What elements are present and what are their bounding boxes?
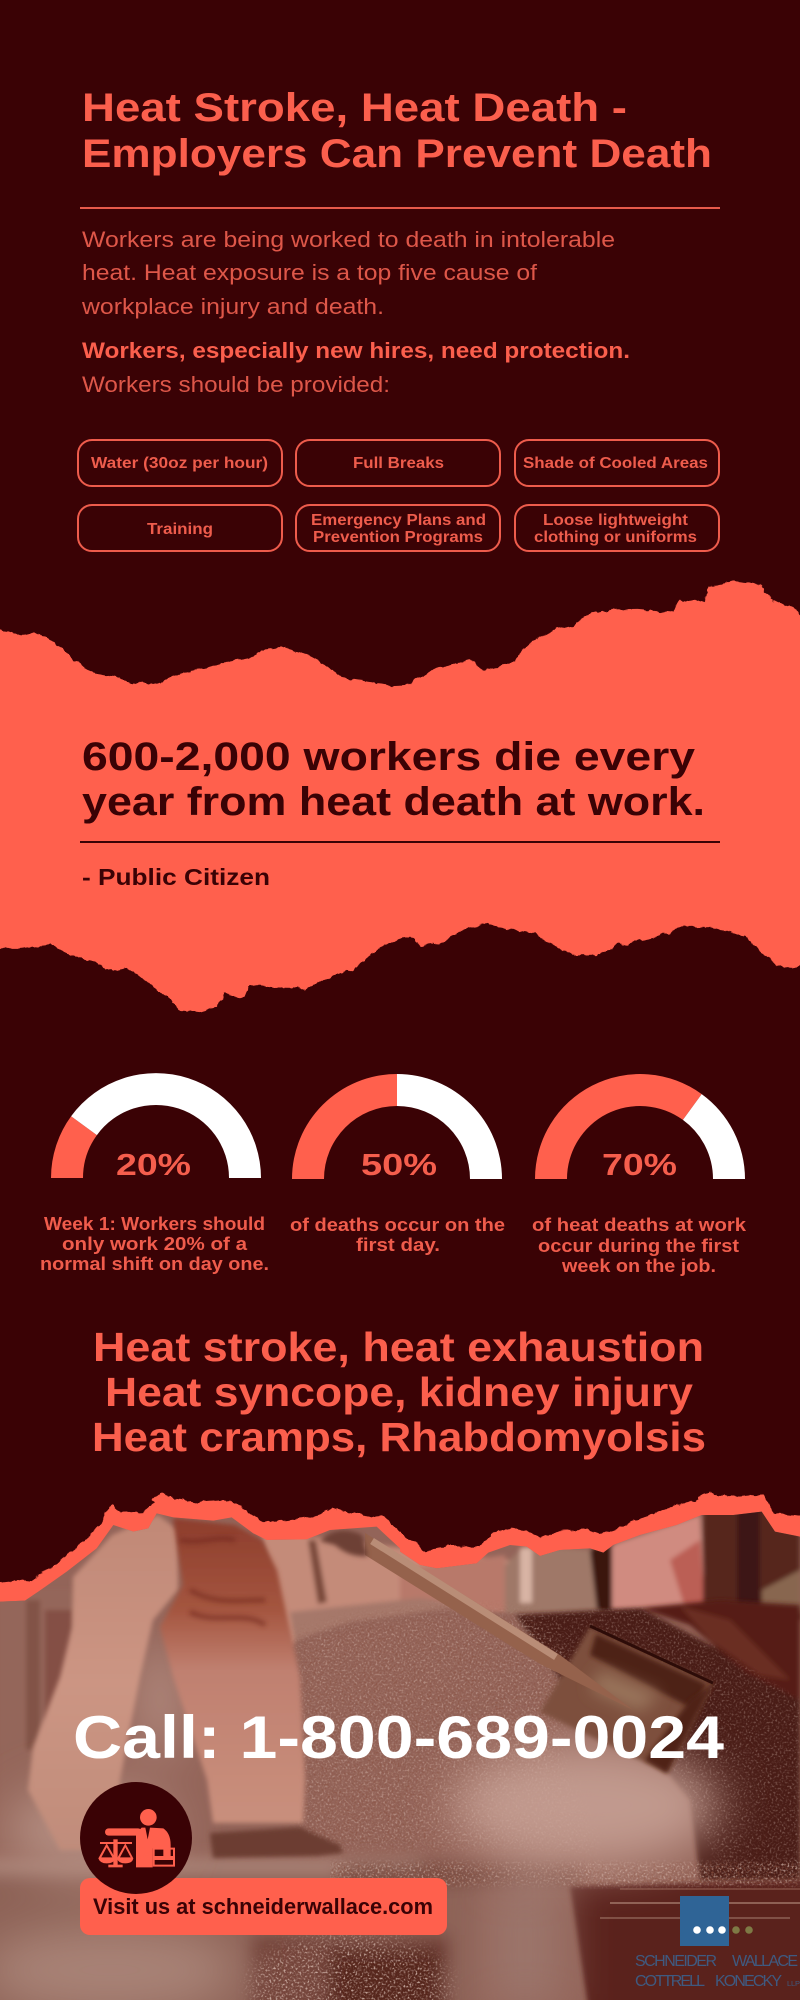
- phone number: Call: 1-800-689-0024: [73, 1704, 725, 1771]
- photo: ground band and lower ground: [0, 1860, 580, 2000]
- photo: gravel pile: [295, 1600, 800, 1880]
- button: training: Training: [147, 521, 213, 538]
- protection statement: Workers, especially new hires, need protection.: [82, 338, 630, 363]
- button: emergency plans: [296, 505, 500, 551]
- photo: gloved hand: [320, 1530, 368, 1556]
- statistic heading: year from heat death at work.: [82, 780, 705, 824]
- statistic heading: 600-2,000 workers die every: [82, 735, 696, 779]
- statistic source: - Public Citizen: [82, 864, 270, 890]
- photo: boot: [210, 1827, 343, 1858]
- intro paragraph: Workers are being worked to death in intolerable: [82, 227, 615, 252]
- photo: shovel blade: [540, 1626, 713, 1773]
- firm logo: LLP: [787, 1979, 800, 1988]
- button: clothing: clothing or uniforms: [534, 529, 697, 546]
- firm logo: KONECKY: [715, 1973, 782, 1990]
- torn coral statistic band: [0, 582, 800, 1013]
- button: water: [78, 440, 282, 486]
- torn coral edge: [0, 1493, 800, 2000]
- firm logo: WALLACE: [732, 1953, 798, 1970]
- caption: week one: Week 1: Workers should: [44, 1213, 265, 1234]
- gauge: 20 percent: [51, 1073, 261, 1182]
- protection statement: [82, 338, 630, 397]
- caption: first week: week on the job.: [561, 1255, 716, 1276]
- photo: lower ground grain: [244, 1935, 458, 2000]
- firm logo: COTTRELL: [635, 1973, 705, 1990]
- caption: week one: only work 20% of a: [62, 1233, 248, 1254]
- button: full breaks: [296, 440, 500, 486]
- caption: first day: first day.: [356, 1234, 440, 1255]
- protection statement: Workers should be provided:: [82, 372, 390, 397]
- caption: week one: normal shift on day one.: [40, 1253, 269, 1274]
- illnesses list: Heat syncope, kidney injury: [105, 1369, 693, 1415]
- photo: shovel handle: [365, 1533, 633, 1710]
- statistic heading: [82, 735, 705, 824]
- caption: first day: [290, 1214, 505, 1255]
- photo: mist clouds: [0, 1640, 720, 2000]
- photo: left trouser leg: [28, 1515, 178, 1850]
- title: Heat Stroke, Heat Death -: [82, 86, 627, 130]
- statistic divider: [80, 841, 720, 843]
- intro paragraph: workplace injury and death.: [81, 294, 384, 319]
- website button: Visit us at schneiderwallace.com: [93, 1894, 433, 1919]
- caption: first week: [532, 1214, 747, 1276]
- intro paragraph: heat. Heat exposure is a top five cause of: [82, 260, 538, 285]
- button: emergency plans: Prevention Programs: [313, 529, 483, 546]
- button: full breaks: Full Breaks: [353, 455, 444, 472]
- button: emergency plans: Emergency Plans and: [311, 512, 486, 529]
- gauge: 70 percent: 70%: [602, 1147, 677, 1182]
- button: shade: Shade of Cooled Areas: [523, 455, 708, 472]
- photo: right trouser leg: [160, 1518, 305, 1823]
- photo: dark floor at lower right: [570, 1880, 800, 2000]
- gauge: 50 percent: [292, 1074, 502, 1182]
- icon: lawyer with scales: [80, 1782, 192, 1894]
- title: Employers Can Prevent Death: [82, 132, 712, 176]
- intro paragraph: [81, 227, 615, 319]
- button: training: [78, 505, 282, 551]
- website button: [80, 1878, 447, 1935]
- caption: first day: of deaths occur on the: [290, 1214, 505, 1235]
- gauge: 50 percent: 50%: [361, 1147, 437, 1182]
- photo: trouser folds: [180, 1539, 265, 1625]
- gauge: 70 percent: [535, 1074, 745, 1182]
- gauge: 20 percent: 20%: [116, 1147, 191, 1182]
- title: [82, 86, 712, 176]
- photo: pebble band: [330, 1860, 800, 1889]
- illnesses list: [92, 1324, 706, 1460]
- button: water: Water (30oz per hour): [91, 455, 268, 472]
- title divider: [80, 207, 720, 209]
- button: clothing: Loose lightweight: [543, 512, 689, 529]
- photo: worker shoveling asphalt: [0, 1490, 800, 2000]
- button: clothing: [515, 505, 719, 551]
- firm logo: [635, 1896, 800, 1990]
- provisions button grid: [78, 440, 719, 551]
- caption: first week: of heat deaths at work: [532, 1214, 747, 1235]
- caption: week one: [40, 1213, 269, 1274]
- illnesses list: Heat stroke, heat exhaustion: [93, 1324, 704, 1370]
- photo: gravel grain: [280, 1600, 800, 1880]
- firm logo: SCHNEIDER: [635, 1953, 717, 1970]
- button: shade: [515, 440, 719, 486]
- photo: background wall and trees: [0, 1512, 800, 1750]
- caption: first week: occur during the first: [538, 1235, 739, 1256]
- illnesses list: Heat cramps, Rhabdomyolsis: [92, 1414, 706, 1460]
